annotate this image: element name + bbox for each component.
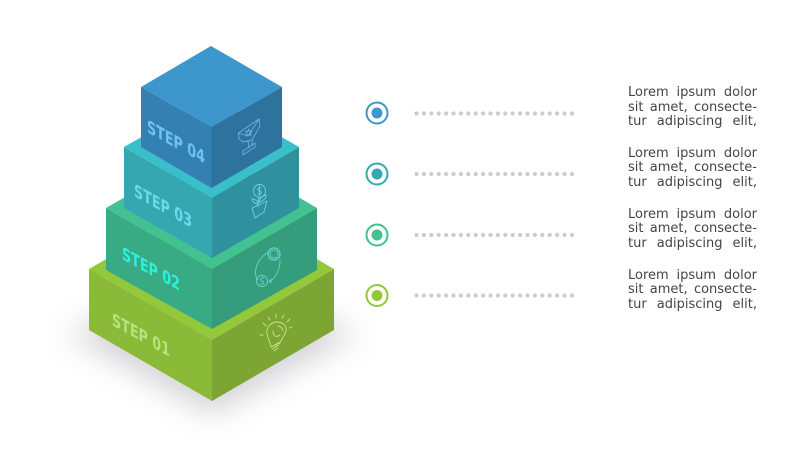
text block 4 [628,268,757,312]
step 02 block [106,147,317,329]
text block 4: Lorem ipsum dolor [628,268,757,282]
text block 4: tur adipiscing elit, [628,297,757,312]
text block 1: sit amet, consecte- [628,100,757,115]
text block 3: Lorem ipsum dolor [628,206,757,222]
text block 3: tur adipiscing elit, [628,236,757,251]
text block 1: Lorem ipsum dolor [628,85,757,100]
text block 4: sit amet, consecte- [628,282,757,297]
text block 1 [628,85,757,129]
dotted connector 3 [416,233,572,237]
marker row 3 [366,224,572,246]
icon: trophy [238,119,260,155]
marker row 2 [366,164,572,184]
base shadow [66,285,358,414]
text block 2: tur adipiscing elit, [628,175,757,190]
text block 2 [628,146,757,190]
icon: coin plant [252,184,267,218]
text block 1: tur adipiscing elit, [628,114,757,129]
marker: green ring [366,224,388,246]
text block 3 [628,206,757,251]
marker: blue ring [366,102,388,124]
label: step 03: STEP 03 [134,181,192,233]
dotted connector 4 [416,293,572,298]
marker: teal ring [366,164,388,184]
label: step 02: STEP 02 [122,244,180,296]
text block 2: sit amet, consecte- [628,160,757,175]
dotted connector 2 [416,172,572,176]
icon: money and gear cycle [256,248,280,286]
marker: lime ring [366,285,388,306]
marker row 4 [366,285,572,306]
text block 2: Lorem ipsum dolor [628,146,757,160]
label: step 04: STEP 04 [147,117,205,169]
marker row 1 [366,102,572,124]
text block 3: sit amet, consecte- [628,221,757,236]
step 03 block [124,97,299,258]
step 01 block [89,198,334,401]
label: step 01: STEP 01 [112,310,170,362]
step 04 block [141,46,282,188]
icon: light bulb [260,314,292,351]
dotted connector 1 [416,111,572,116]
